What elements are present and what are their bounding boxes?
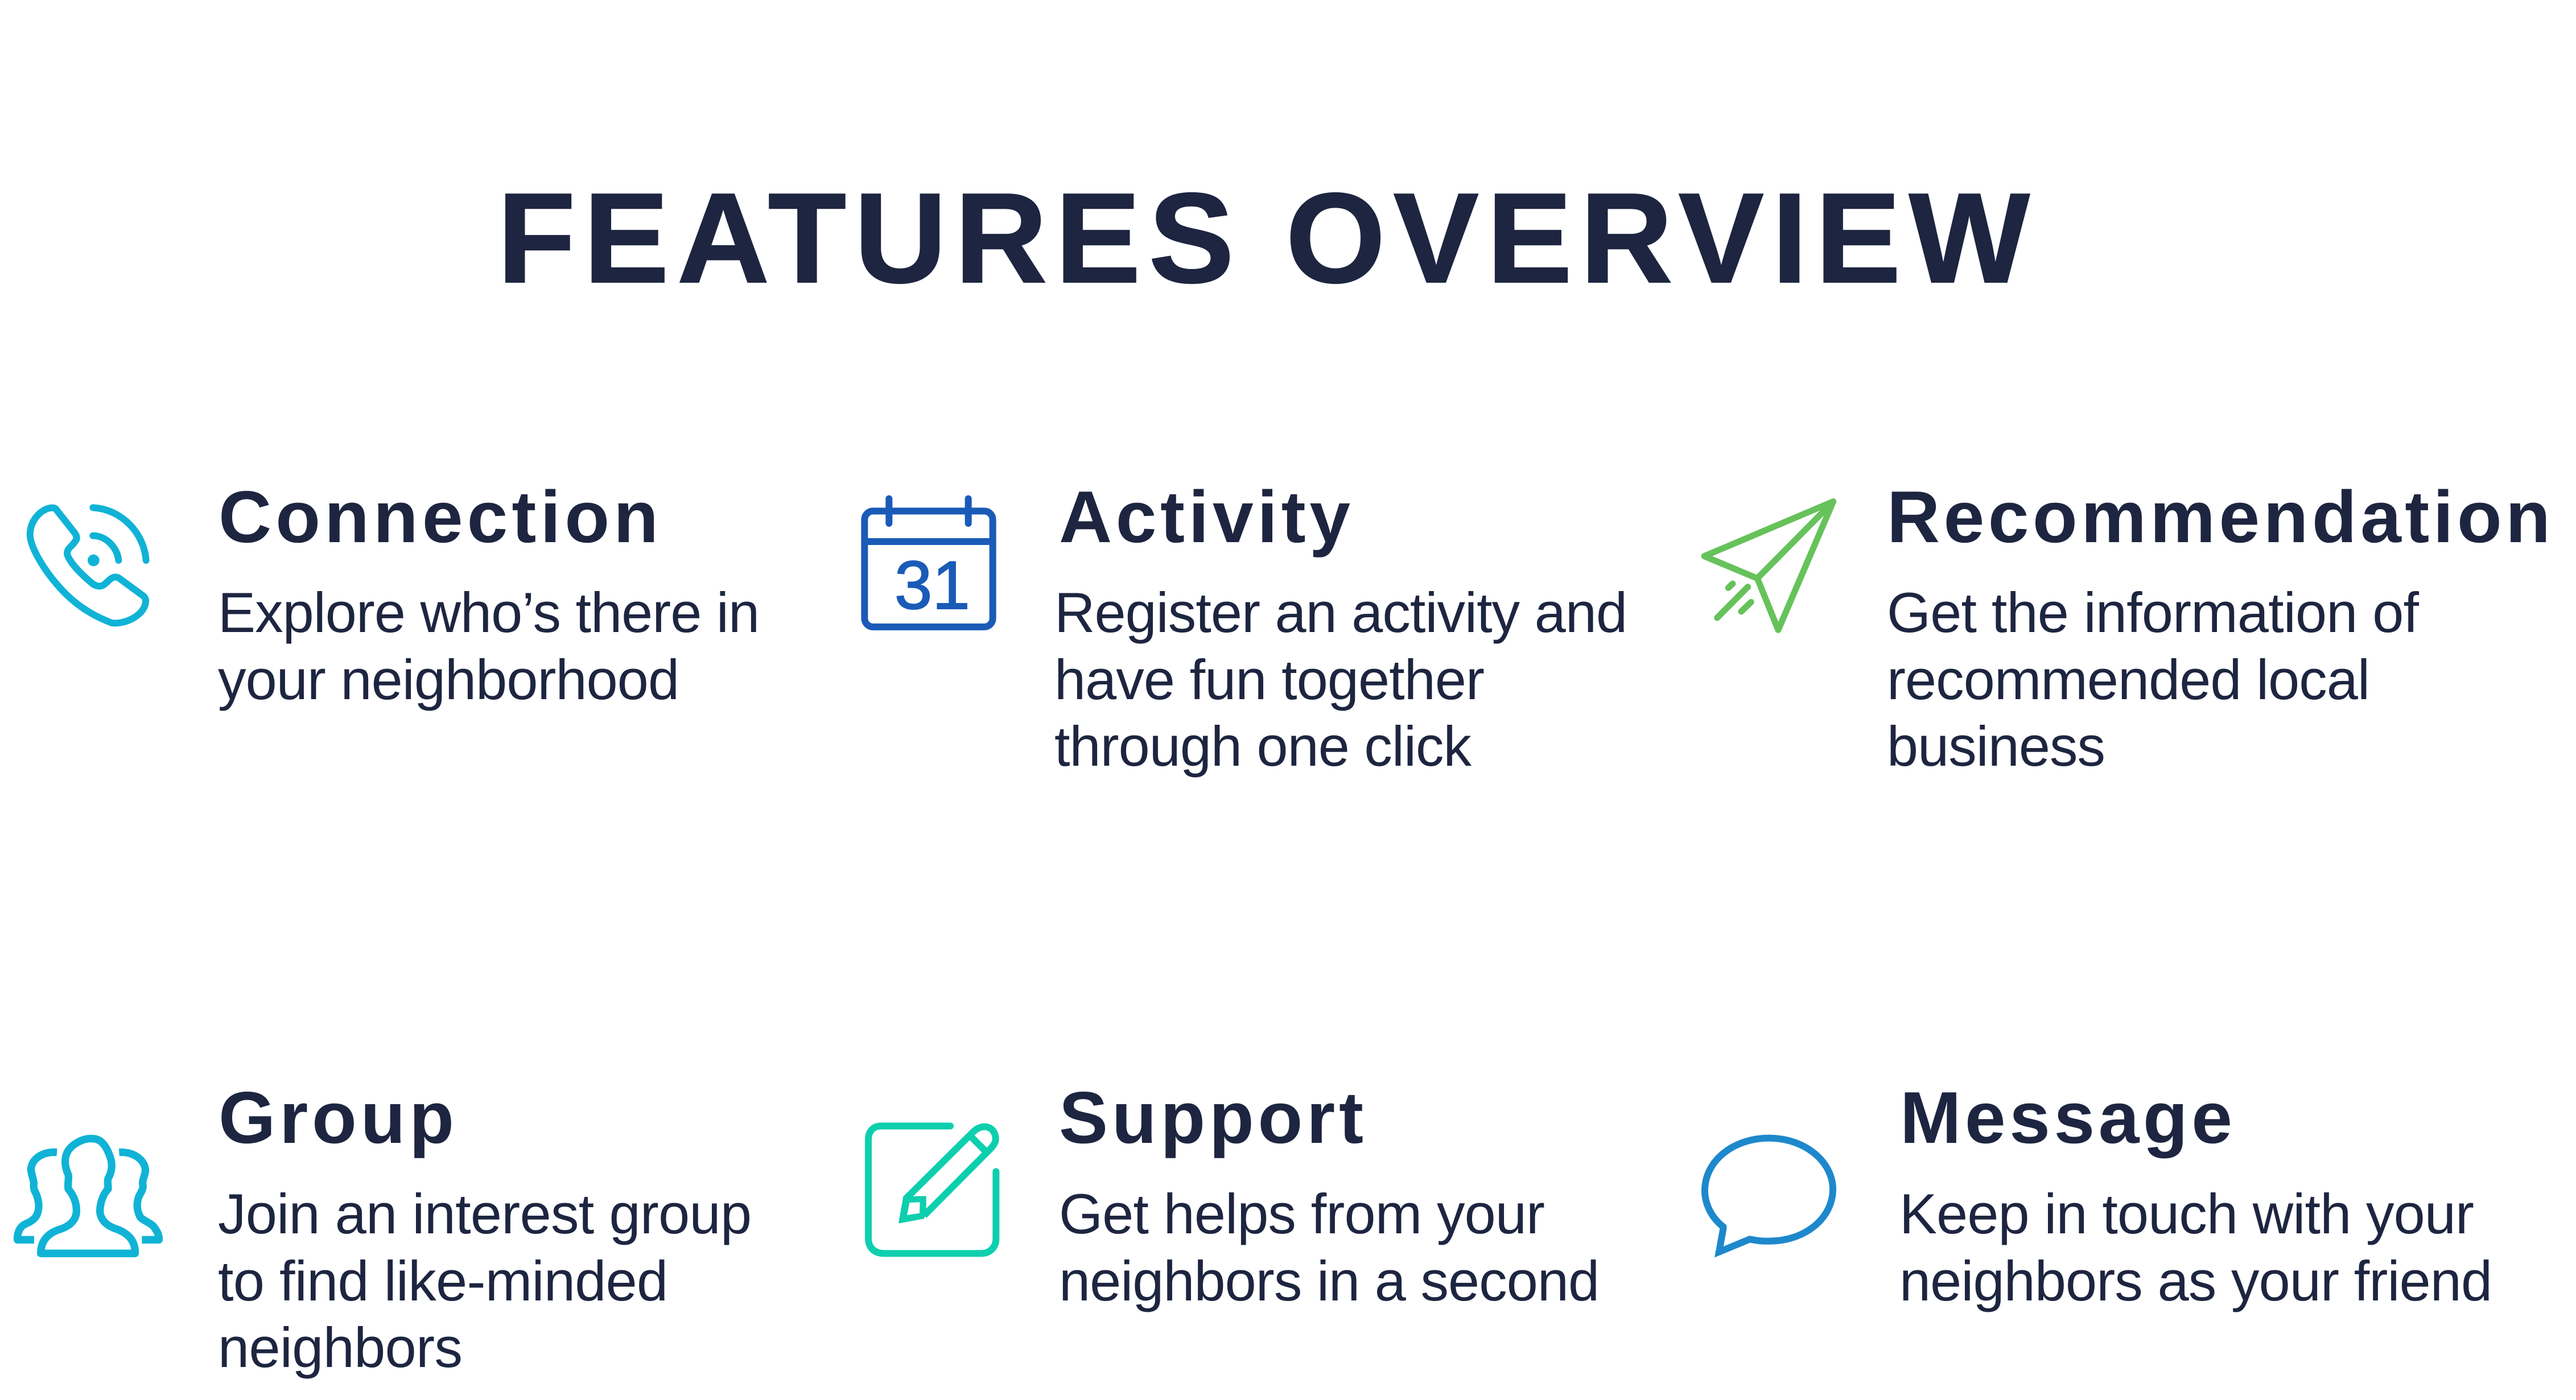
text: support description bbox=[1059, 1182, 1600, 1312]
text: activity description bbox=[1054, 581, 1627, 778]
text: message description: neighbors as your friend bbox=[1899, 1249, 2492, 1312]
icon: calendar bbox=[864, 499, 993, 627]
heading: connection: Connection bbox=[219, 476, 658, 558]
text: recommendation description: Get the information of bbox=[1887, 581, 2419, 644]
text: support description: neighbors in a second bbox=[1059, 1249, 1600, 1312]
text: recommendation description bbox=[1887, 581, 2419, 778]
heading: message: Message bbox=[1900, 1077, 2232, 1159]
text: connection description: Explore who’s there in bbox=[218, 581, 760, 644]
text: group description bbox=[218, 1182, 752, 1379]
icon: group of people bbox=[18, 1138, 159, 1253]
text: activity description: Register an activity and bbox=[1054, 581, 1627, 644]
text: group description: to find like-minded bbox=[218, 1249, 668, 1312]
text: connection description bbox=[218, 581, 760, 711]
panel: support bbox=[868, 1077, 1600, 1312]
icon: speech bubble bbox=[1705, 1138, 1833, 1252]
panel: connection bbox=[30, 476, 760, 711]
text: recommendation description: business bbox=[1887, 715, 2105, 778]
text: message description: Keep in touch with your bbox=[1899, 1182, 2474, 1245]
heading: activity: Activity bbox=[1059, 476, 1350, 558]
panel: group bbox=[18, 1077, 752, 1379]
text: support description: Get helps from your bbox=[1059, 1182, 1545, 1245]
text: group description: Join an interest group bbox=[218, 1182, 752, 1245]
heading: support: Support bbox=[1059, 1077, 1363, 1159]
text: connection description: your neighborhood bbox=[218, 648, 679, 711]
icon: paper plane bbox=[1704, 502, 1833, 630]
text: activity description: through one click bbox=[1054, 715, 1472, 778]
heading: recommendation: Recommendation bbox=[1887, 476, 2550, 558]
text: activity description: have fun together bbox=[1054, 648, 1485, 711]
icon: pencil and note bbox=[868, 1126, 996, 1253]
heading: group: Group bbox=[219, 1077, 454, 1159]
title: FEATURES OVERVIEW bbox=[497, 166, 2030, 309]
icon: phone bbox=[30, 507, 146, 623]
text: group description: neighbors bbox=[218, 1316, 463, 1379]
panel: activity bbox=[864, 476, 1627, 778]
panel: message bbox=[1705, 1077, 2492, 1312]
text: message description bbox=[1899, 1182, 2492, 1312]
icon: calendar: 31 bbox=[895, 548, 970, 623]
panel: recommendation bbox=[1704, 476, 2550, 778]
text: recommendation description: recommended local bbox=[1887, 648, 2370, 711]
